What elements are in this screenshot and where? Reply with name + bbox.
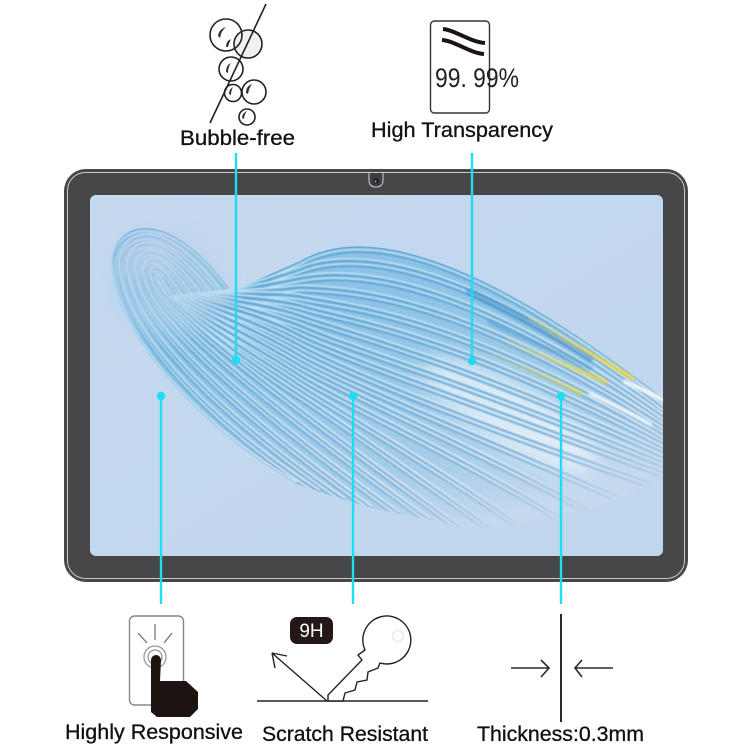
callout line: highly responsive	[157, 392, 165, 604]
icon: transparency card	[430, 21, 519, 113]
callout line: thickness	[557, 392, 565, 604]
transparency value: 99. 99%	[435, 63, 519, 93]
badge: 9H: 9H	[299, 621, 324, 642]
label: scratch resistant: Scratch Resistant	[262, 723, 428, 746]
tablet body	[64, 169, 688, 582]
screen wallpaper	[90, 195, 663, 556]
camera notch	[369, 173, 383, 187]
icon: bubbles	[210, 4, 266, 125]
icon: key scratch	[257, 616, 428, 701]
callout line: scratch resistant	[349, 392, 357, 604]
label: highly responsive: Highly Responsive	[65, 721, 243, 744]
heading: bubble-free: Bubble-free	[180, 127, 295, 150]
icon: touch finger	[130, 616, 198, 717]
wave artwork	[103, 226, 663, 532]
callout line: high transparency	[468, 153, 476, 365]
icon: thickness arrows	[511, 614, 613, 722]
glass edge highlight	[68, 172, 684, 578]
label: thickness: Thickness:0.3mm	[477, 723, 644, 746]
tablet	[64, 169, 688, 582]
callout line: bubble-free	[232, 153, 240, 364]
heading: high transparency: High Transparency	[371, 119, 554, 142]
badge: 9H	[290, 617, 333, 644]
